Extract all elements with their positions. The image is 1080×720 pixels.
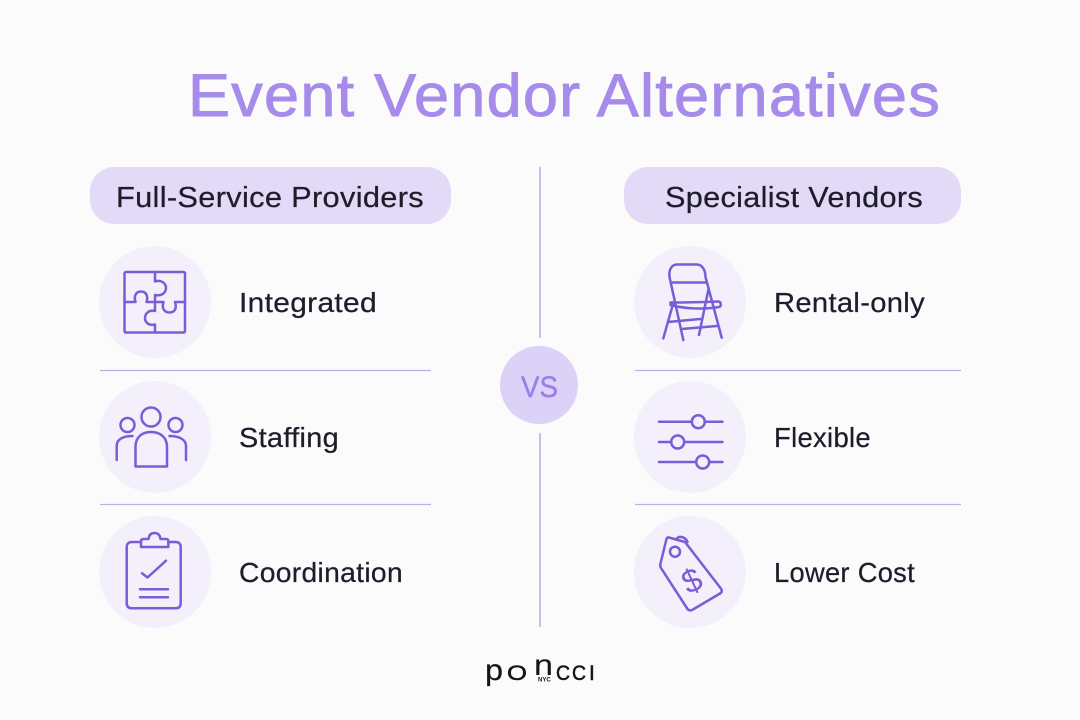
logo: I <box>589 662 595 685</box>
heading: full-service providers <box>90 167 451 224</box>
logo: NYC <box>538 678 551 684</box>
label: staffing: Staffing <box>239 422 339 453</box>
icon: folding chair <box>663 264 722 340</box>
title: Event Vendor Alternatives <box>188 62 941 129</box>
label: rental-only: Rental-only <box>774 287 925 318</box>
icon: price tag: $ <box>676 560 708 601</box>
logo: C <box>572 662 586 685</box>
center divider bottom <box>539 433 541 627</box>
icon: clipboard <box>127 533 181 608</box>
panel: specialist vendors <box>624 167 961 628</box>
logo: p <box>485 654 503 687</box>
heading: full-service providers: Full-Service Providers <box>116 182 424 214</box>
icon: puzzle <box>124 272 185 332</box>
item: flexible <box>634 381 871 493</box>
label: lower cost: Lower Cost <box>774 557 915 588</box>
label: integrated: Integrated <box>239 287 377 318</box>
label: flexible: Flexible <box>774 422 871 453</box>
heading: specialist vendors <box>624 167 961 224</box>
item: integrated <box>99 246 377 358</box>
vs badge: VS <box>521 371 558 404</box>
logo: n <box>534 649 553 682</box>
icon: people <box>117 408 186 466</box>
item: coordination <box>99 516 403 628</box>
vs badge <box>500 346 578 424</box>
logo: C <box>556 662 570 685</box>
logo: O <box>507 662 527 685</box>
logo <box>485 649 595 687</box>
item: staffing <box>99 381 339 493</box>
item: rental-only <box>634 246 925 358</box>
label: coordination: Coordination <box>239 557 403 588</box>
panel: full-service providers <box>90 167 451 628</box>
center divider top <box>539 167 541 338</box>
item: lower cost <box>634 516 915 628</box>
icon: price tag <box>660 537 722 610</box>
heading: specialist vendors: Specialist Vendors <box>665 182 923 214</box>
icon: sliders <box>659 415 722 468</box>
